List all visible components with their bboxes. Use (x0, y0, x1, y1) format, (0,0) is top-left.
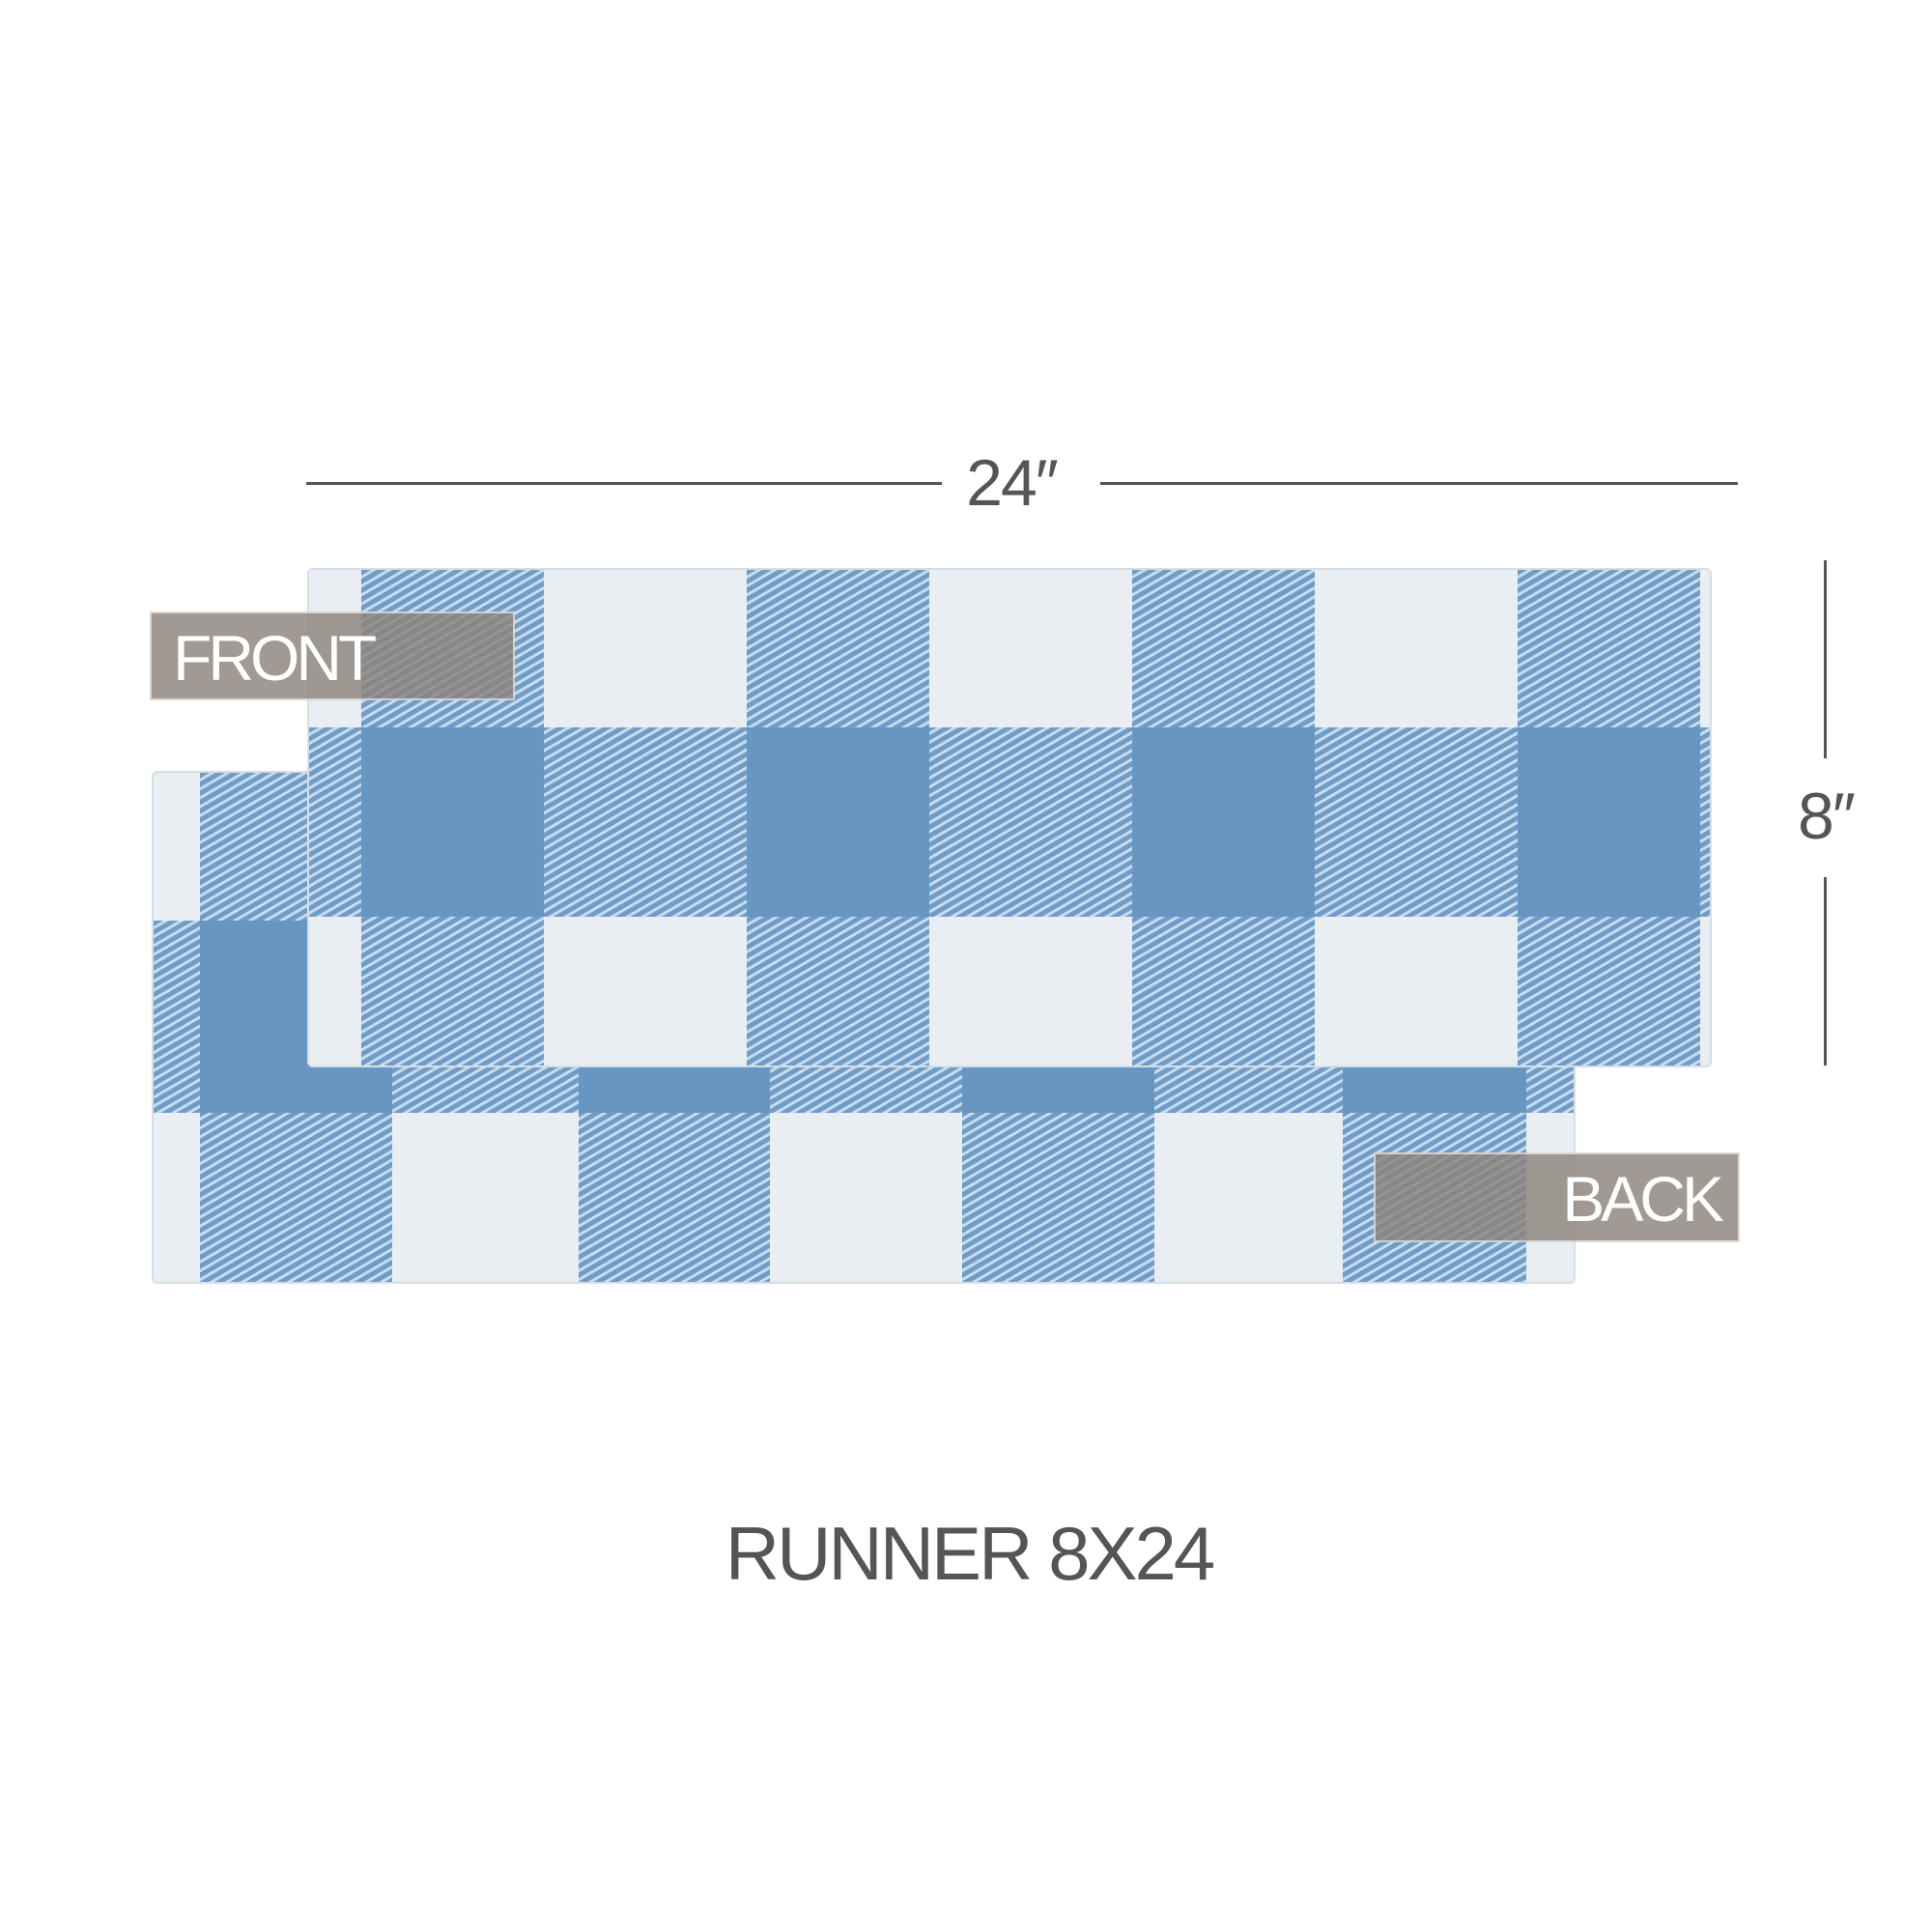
dimension: width 24: 24″ (966, 446, 1057, 520)
caption: RUNNER 8X24 (725, 1511, 1212, 1596)
dimension: width 24 (306, 446, 1738, 520)
runner: back (152, 771, 1576, 1284)
runner: front (307, 568, 1712, 1067)
dimension: height 8 (1798, 560, 1855, 1065)
label: BACK (1374, 1152, 1740, 1242)
label: FRONT (150, 611, 515, 700)
label: FRONT: FRONT (173, 622, 373, 694)
label: BACK: BACK (1562, 1163, 1720, 1235)
dimension: height 8: 8″ (1798, 780, 1854, 853)
